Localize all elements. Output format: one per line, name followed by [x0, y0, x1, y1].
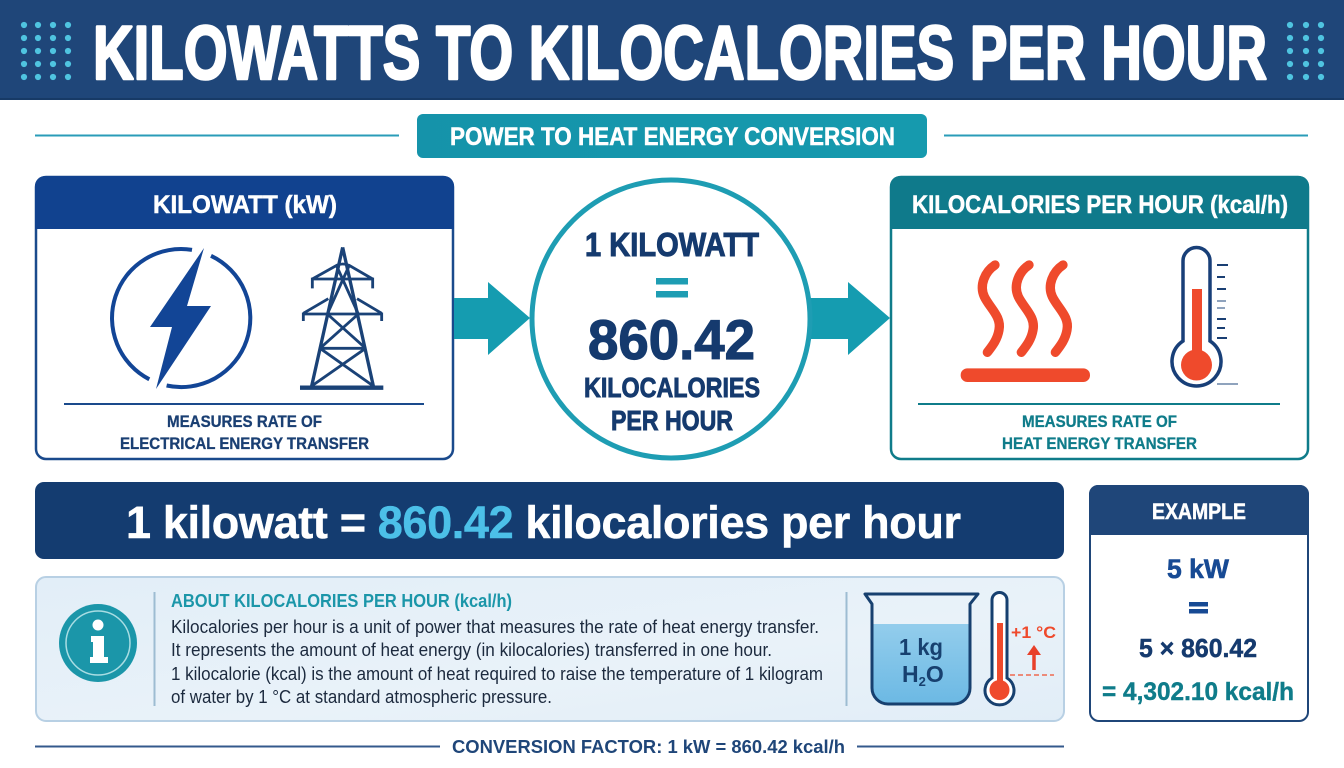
panel caption: HEAT ENERGY TRANSFER	[1002, 435, 1197, 453]
panel caption	[120, 413, 369, 453]
about body text: of water by 1 °C at standard atmospheric pressure.	[171, 687, 552, 707]
conversion circle: 860.42	[588, 308, 755, 371]
icon: beaker of water: 1 kg	[899, 634, 943, 660]
panel caption: ELECTRICAL ENERGY TRANSFER	[120, 435, 369, 453]
panel caption: MEASURES RATE OF	[1022, 413, 1177, 431]
icon: thermometer	[1172, 248, 1238, 386]
icon: right dot grid	[1287, 22, 1324, 80]
subtitle pill	[417, 114, 927, 158]
temperature rise label: +1 °C	[1011, 623, 1056, 642]
temperature rise label	[1010, 623, 1056, 675]
formula banner: 1 kilowatt = 860.42 kilocalories per hour	[126, 497, 961, 548]
icon: transmission tower	[300, 247, 383, 388]
panel caption: MEASURES RATE OF	[167, 413, 322, 431]
arrow: conversion to kilocalories	[808, 282, 890, 355]
conversion circle	[532, 180, 810, 458]
conversion circle: PER HOUR	[611, 405, 733, 436]
panel: kilocalories per hour	[890, 176, 1309, 459]
panel: example: EXAMPLE	[1152, 499, 1246, 524]
about body text: It represents the amount of heat energy (in kilocalories) transferred in one hour.	[171, 640, 772, 660]
conversion circle: KILOCALORIES	[584, 372, 760, 403]
about body text	[171, 617, 823, 707]
icon: info	[59, 604, 137, 682]
icon: beaker of water: H	[902, 661, 919, 687]
equals sign	[656, 278, 688, 298]
equals sign	[1189, 602, 1208, 614]
panel heading: KILOWATT (kW)	[153, 191, 337, 219]
about heading: ABOUT KILOCALORIES PER HOUR (kcal/h)	[171, 591, 512, 611]
header banner	[0, 0, 1344, 100]
formula banner	[35, 482, 1064, 559]
panel: about kilocalories per hour	[36, 577, 1064, 721]
subtitle pill: POWER TO HEAT ENERGY CONVERSION	[450, 123, 895, 151]
icon: small thermometer	[985, 593, 1014, 705]
conversion factor footer: CONVERSION FACTOR: 1 kW = 860.42 kcal/h	[452, 737, 845, 757]
about body text: Kilocalories per hour is a unit of power that measures the rate of heat energy transfer.	[171, 617, 819, 637]
panel: example: 5 × 860.42	[1139, 633, 1257, 663]
panel: example	[1089, 485, 1309, 721]
panel: kilowatt	[35, 176, 454, 459]
arrow: kilowatt to conversion	[454, 282, 530, 355]
icon: beaker of water: O	[926, 661, 944, 687]
panel heading: KILOCALORIES PER HOUR (kcal/h)	[912, 191, 1288, 219]
icon: beaker of water	[865, 594, 978, 704]
panel: example: = 4,302.10 kcal/h	[1102, 678, 1294, 706]
panel caption	[1002, 413, 1197, 453]
icon: lightning bolt in circle	[112, 248, 250, 389]
icon: beaker of water: 2	[919, 674, 926, 689]
panel: example: 5 kW	[1167, 554, 1229, 584]
icon: heat waves	[961, 265, 1090, 382]
conversion circle: 1 KILOWATT	[585, 226, 759, 263]
about body text: 1 kilocalorie (kcal) is the amount of heat required to raise the temperature of 1 kilogram	[171, 664, 823, 684]
icon: left dot grid	[21, 22, 71, 80]
